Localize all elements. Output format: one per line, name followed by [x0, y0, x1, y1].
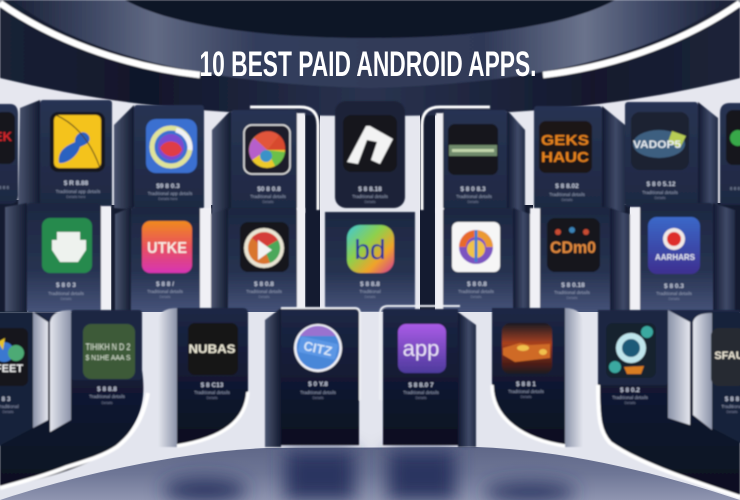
- lower ceiling rim: [0, 0, 740, 116]
- card: photo ring app: $0 8 0.8: [257, 186, 281, 193]
- card: navy AARHARS app: AARHARS: [655, 252, 695, 262]
- card: NUBAS app: NUBAS: [188, 342, 236, 356]
- card: navy AARHARS app: [630, 203, 735, 314]
- card: photo ring app: Traditional details: [250, 194, 287, 199]
- card: orange game app: [534, 106, 625, 212]
- card: purple app: [380, 306, 476, 447]
- dark sweep: lower-left cards base: [0, 312, 143, 488]
- card: left cut-off FEET app: 8 3: [1, 396, 11, 403]
- card: purple app: Details: [416, 396, 427, 400]
- card: center black app: Details: [364, 200, 376, 204]
- card: orange game app: HAUC: [541, 149, 589, 166]
- card: orange pink app: Details: [160, 295, 171, 299]
- card: center black app: Traditional details: [352, 194, 389, 199]
- card: CITIZ circle app: Traditional details: [300, 390, 337, 395]
- card: CDM game app: Traditional details: [554, 290, 591, 295]
- card: green strip app: [436, 110, 525, 215]
- card: orange game app: GEKS: [541, 132, 589, 149]
- floor surface: [0, 447, 740, 500]
- card: green android app: Traditional details: [48, 291, 85, 296]
- card: yellow app: $ R 8.88: [64, 180, 89, 187]
- card: teal ring app: Details: [624, 401, 636, 405]
- card: NUBAS app: Traditional details: [194, 390, 231, 395]
- card: CITIZ circle app: $ 0 Y.8: [308, 381, 328, 388]
- card: center black app: [335, 101, 405, 208]
- floor reflections: [163, 450, 576, 500]
- glowing white stripe left: [0, 3, 200, 75]
- card: white ring app: Traditional details: [458, 289, 495, 294]
- upper ceiling reflective band: [12, 0, 728, 88]
- card: bd gradient app: [325, 212, 415, 312]
- card: green text app: TIHIKH N D 2: [86, 342, 130, 352]
- card: blue ring app: [114, 105, 204, 210]
- card: red lava app: Traditional details: [508, 389, 545, 394]
- card: CITIZ circle app: CITZ: [302, 338, 334, 359]
- card: teal ring app: Traditional details: [612, 395, 649, 400]
- card: yellow app: [18, 100, 112, 208]
- dark sweep: lower-right cards base: [598, 310, 740, 496]
- card: bd gradient app: Details: [364, 295, 376, 299]
- card: purple app: app: [403, 336, 439, 361]
- card: yellow app: Traditional app details: [56, 189, 101, 194]
- middle row of app cards: [5, 203, 735, 314]
- card: CDM game app: Details: [566, 296, 578, 300]
- card: purple app: Traditional details: [403, 390, 440, 395]
- card: CDM game app: CDm0: [550, 238, 596, 257]
- card: bd gradient app: bd: [354, 234, 386, 265]
- card: blue logo app: VADOP5: [633, 139, 681, 151]
- card: green text app: Traditional details: [89, 394, 126, 399]
- card: blue logo app: Details: [654, 196, 666, 200]
- card: CITIZ circle app: Details: [312, 396, 324, 400]
- light base behind bottom row: [0, 312, 740, 500]
- card: CDM game app: $ 8 0.18: [561, 282, 585, 289]
- floor: [0, 447, 740, 500]
- card: right cut-off SFAU app: Details: [726, 410, 738, 414]
- card: center black app: $ 8 8.18: [358, 186, 382, 193]
- card: photo ring app: [212, 110, 305, 215]
- card: teal ring app: $ 8 0.2: [620, 387, 640, 394]
- card: green text app: [50, 310, 142, 432]
- card: yellow app: Details here: [66, 195, 86, 199]
- card: orange pink app: [115, 207, 211, 314]
- card: NUBAS app: $ 8 C13: [201, 382, 224, 389]
- card: white ring app: $ 8 0.8: [467, 281, 487, 288]
- card: purple app: $ 8 8.0 7: [408, 382, 434, 389]
- card: right cut-off SFAU app: $ 8 8: [725, 396, 740, 403]
- dark ceiling oval: [125, 0, 615, 38]
- card: blue logo app: $ 8 0 5.12: [647, 181, 676, 188]
- card: white ring app: [436, 208, 530, 314]
- card: green strip app: Traditional details: [456, 194, 493, 199]
- card: navy AARHARS app: Traditional details: [656, 291, 693, 296]
- card: blue logo app: Traditional details: [642, 190, 679, 195]
- card: blue ring app: Details here: [158, 197, 178, 201]
- card: CITIZ circle app: [265, 308, 360, 447]
- card: cut-off red app: [0, 104, 18, 204]
- card: green text app: $ 8 8.8: [97, 386, 117, 393]
- white glowing curve left: [0, 393, 148, 488]
- card: orange pink app: $ 8 8 /: [156, 281, 174, 288]
- card: NUBAS app: [158, 308, 248, 447]
- ceiling band: [0, 0, 740, 116]
- card: colour circle app: Details: [258, 295, 270, 299]
- card: red lava app: [492, 308, 583, 447]
- card: red lava app: $ 8 8 1: [516, 381, 536, 388]
- card: green text app: Details: [102, 401, 113, 405]
- panel frame: white top line right: [422, 107, 490, 210]
- card: colour circle app: [211, 208, 305, 314]
- card: red lava app: Details: [520, 395, 532, 399]
- card: teal ring app: [598, 310, 740, 497]
- card: cut-off green app: [720, 103, 740, 205]
- title: 10 BEST PAID ANDROID APPS.: [200, 45, 536, 84]
- card: orange pink app: UTKE: [147, 240, 187, 257]
- card: blue ring app: Traditional app details: [148, 191, 193, 196]
- card: left cut-off FEET app: Details: [2, 410, 14, 414]
- glowing white stripe right: [543, 3, 740, 75]
- card: cut-off green app: 8 8 8: [730, 186, 740, 191]
- card: green text app: $ N1HE AAA S: [86, 355, 131, 362]
- bottom row of app cards: [0, 306, 740, 497]
- card: white ring app: Details: [470, 295, 482, 299]
- panel frame: white top line: [250, 107, 318, 210]
- top row of app cards: [0, 100, 740, 215]
- card: navy AARHARS app: $ 8 0.3: [664, 283, 684, 290]
- card: bd gradient app: Traditional: [359, 289, 381, 294]
- card: blue ring app: $9 8 0.3: [156, 183, 180, 190]
- card: left cut-off FEET app: [0, 312, 48, 448]
- card: green android app: $ 8 0 3: [56, 282, 76, 289]
- card: orange pink app: Traditional details: [147, 289, 184, 294]
- card: orange game app: Traditional details: [549, 192, 586, 197]
- card: right cut-off SFAU app: [693, 312, 740, 445]
- card: blue logo app: [625, 102, 718, 207]
- card: green android app: [5, 203, 111, 314]
- card: green strip app: Details: [468, 200, 479, 204]
- card: CDM game app: [530, 207, 632, 314]
- card: photo ring app: Details: [262, 200, 274, 204]
- card: orange game app: $ 8 8.02: [555, 183, 579, 190]
- card: colour circle app: $ 8 0.8: [254, 281, 274, 288]
- card: colour circle app: Traditional details: [246, 289, 283, 294]
- card: green strip app: $ 8 0 8.3: [460, 186, 486, 193]
- card: NUBAS app: Details: [206, 396, 218, 400]
- dark vertical pillars: [0, 108, 740, 315]
- card: navy AARHARS app: Details: [668, 297, 680, 301]
- card: green android app: Details: [60, 297, 72, 301]
- card: orange game app: Details: [562, 198, 573, 202]
- card: bd gradient app: $ 8 8.8: [360, 281, 380, 288]
